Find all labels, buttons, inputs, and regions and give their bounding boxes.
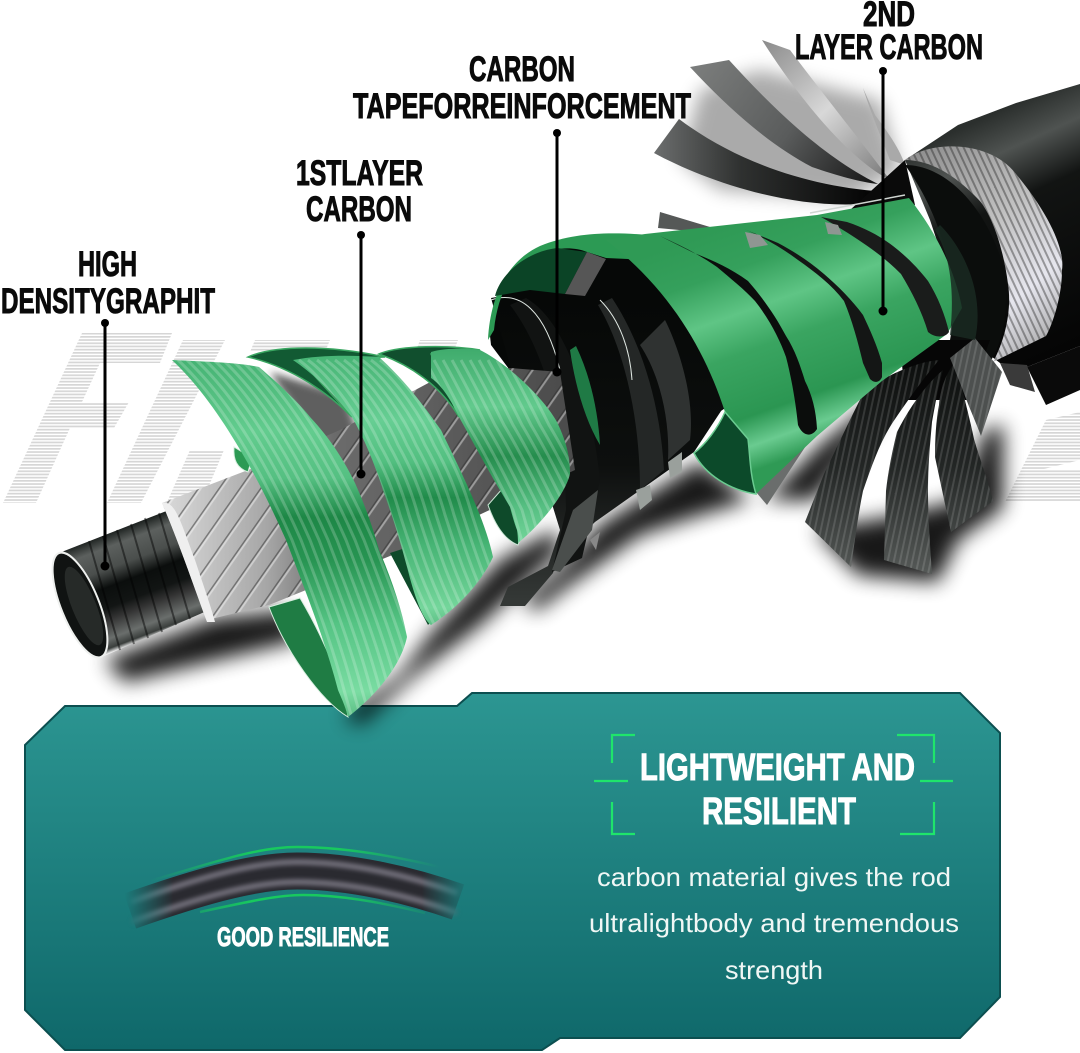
- label: 2nd layer carbon: LAYER CARBON: [795, 28, 983, 67]
- dark inner arch: [495, 248, 587, 296]
- ribbon 1 back pieces: [269, 598, 348, 717]
- watermark logo stripes: [3, 333, 1080, 503]
- lower carbon fan strips: [756, 338, 1002, 574]
- arch and tape backing: [490, 235, 730, 490]
- heading: lightweight and resilient: LIGHTWEIGHT AND: [640, 747, 915, 789]
- ribbon 3 inner: [379, 347, 480, 417]
- gap between ribbons: [744, 229, 882, 382]
- gray high density graphite section: [162, 368, 575, 622]
- body text: strength: [725, 955, 823, 985]
- inner structure at cone end: [935, 225, 978, 340]
- green back arch: [488, 233, 690, 340]
- body text: [589, 862, 959, 985]
- label: high density graphite: DENSITYGRAPHIT: [1, 282, 215, 321]
- heading: lightweight and resilient: RESILIENT: [702, 791, 856, 833]
- green carbon cone: [606, 195, 962, 494]
- upper fan shadow: [680, 70, 900, 200]
- body text: ultralightbody and tremendous: [589, 908, 959, 938]
- label: high density graphite: [1, 245, 215, 570]
- green corner brackets: [594, 735, 953, 834]
- rod drop shadow: [105, 392, 1003, 725]
- panel: lightweight and resilient: [25, 693, 1000, 1050]
- ribbon 3 lower inner: [488, 480, 535, 545]
- icon: bent rod showing resilience: [130, 847, 458, 922]
- ribbon 2 inner: [248, 348, 385, 417]
- label: 2nd layer carbon: [795, 0, 983, 316]
- upper carbon fan strips: [654, 40, 915, 232]
- gap between ribbons: [821, 217, 949, 336]
- shaded gap behind ribbons: [270, 372, 362, 450]
- label: 1st layer carbon: 1STLAYER: [296, 154, 423, 193]
- right carbon cylinder: [905, 84, 1080, 405]
- green carbon ribbon 3: [431, 348, 570, 543]
- green carbon ribbon 2: [293, 356, 493, 625]
- black carbon tape section: [491, 258, 725, 606]
- ribbon 2 lower inner: [390, 540, 450, 625]
- label: carbon tape for reinforcement: CARBON: [469, 50, 575, 89]
- green carbon ribbon 1: [172, 360, 407, 717]
- label: high density graphite: HIGH: [78, 245, 137, 284]
- gap between ribbons: [660, 236, 817, 435]
- label: carbon tape for reinforcement: [353, 50, 691, 376]
- label: carbon tape for reinforcement: TAPEFORREINFORCEMENT: [353, 87, 691, 126]
- caption: good resilience: GOOD RESILIENCE: [217, 922, 389, 952]
- body text: carbon material gives the rod: [597, 862, 951, 892]
- label: 1st layer carbon: [296, 154, 423, 478]
- black graphite tube: [41, 510, 209, 664]
- gray piece inside arch: [565, 252, 606, 296]
- heading: lightweight and resilient: [640, 747, 915, 833]
- label: 1st layer carbon: CARBON: [306, 190, 412, 229]
